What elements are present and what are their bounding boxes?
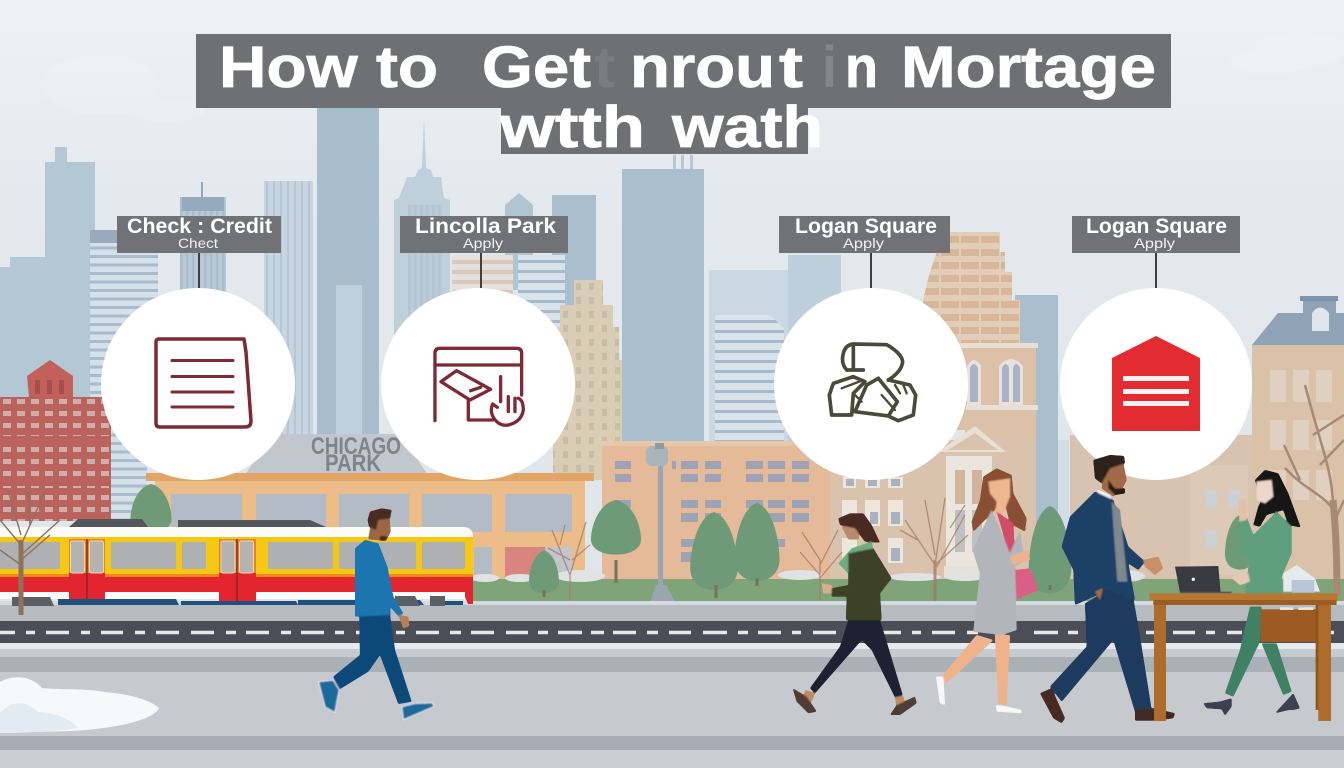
Chicago Park building: PARK — [325, 450, 382, 477]
title banner: i — [822, 35, 837, 100]
title banner: t — [594, 35, 615, 100]
circle 1 with document icon — [101, 288, 295, 480]
step 3 label: Logan Square: Apply — [843, 235, 884, 251]
step 4 label: Logan Square — [1072, 214, 1240, 288]
step 4 label: Logan Square: Apply — [1134, 235, 1175, 251]
clouds — [40, 32, 1344, 122]
icon: hands exchanging keys — [829, 344, 916, 421]
tan tower left — [553, 280, 622, 480]
beige classical building — [830, 426, 1036, 580]
ground: sidewalk, road and pavement — [0, 601, 1344, 768]
icon: red house — [1112, 336, 1200, 431]
orange station building — [146, 473, 594, 580]
snow pile — [0, 677, 159, 733]
person: woman in green suit — [1203, 470, 1301, 716]
bare trees — [548, 498, 968, 603]
person: girl with green scarf — [793, 513, 917, 715]
step 3 label: Logan Square: Logan Square — [795, 214, 937, 238]
circle 3 with hands icon — [774, 288, 968, 480]
step 1 label: Check Credit: Check : Credit — [127, 214, 272, 238]
step 3 label: Logan Square — [779, 214, 950, 288]
lamp post — [646, 443, 676, 603]
grass and snow — [471, 570, 1344, 602]
title banner: t — [779, 35, 803, 100]
step 1 label: Check Credit: Chect — [178, 235, 218, 251]
title banner: Mortage — [901, 35, 1156, 100]
right townhouse — [1070, 296, 1344, 580]
icon: browser window with house and pointing hand — [435, 348, 523, 425]
large bare tree right — [1284, 385, 1344, 595]
title banner: wtth — [499, 95, 645, 160]
title banner: Get — [482, 35, 591, 100]
step 1 label: Check Credit — [117, 214, 281, 288]
step 2 label: Lincolla Park — [400, 214, 568, 288]
tram — [0, 519, 473, 606]
icon: document — [156, 339, 251, 427]
circle 4 with red house icon — [1060, 288, 1252, 480]
Chicago Park building: CHICAGO — [311, 433, 401, 460]
peach building — [602, 441, 830, 579]
step 2 label: Lincolla Park: Lincolla Park — [415, 214, 556, 238]
person: woman in grey suit — [936, 468, 1038, 713]
red brick building — [0, 360, 111, 521]
distant skyline — [0, 108, 1069, 530]
title banner: n — [845, 35, 878, 100]
tan tower right — [905, 232, 1038, 520]
step 2 label: Lincolla Park: Apply — [463, 235, 503, 251]
step 4 label: Logan Square: Logan Square — [1086, 214, 1227, 238]
title banner: nrou — [630, 35, 775, 100]
desk with laptop — [1149, 565, 1338, 721]
person: man in blue walking — [318, 508, 434, 720]
circle 2 with application icon — [381, 288, 575, 480]
person: man in navy suit — [1040, 455, 1175, 723]
trees — [130, 484, 1255, 598]
laptop — [1175, 566, 1232, 593]
title banner: How to — [219, 35, 438, 100]
tram doors — [69, 539, 256, 602]
title banner: wath — [671, 95, 823, 160]
Chicago Park building — [245, 433, 428, 477]
title banner — [196, 34, 1171, 160]
left small bare tree — [0, 490, 60, 615]
